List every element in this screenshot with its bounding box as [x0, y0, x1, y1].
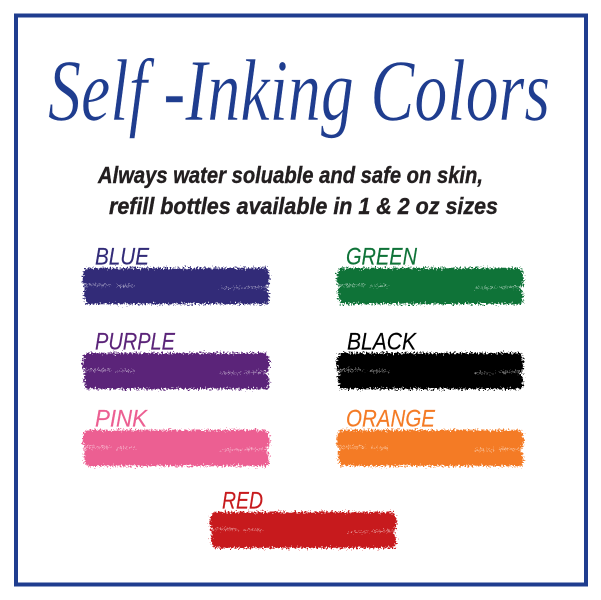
- swatch: red: [210, 488, 398, 548]
- swatch: black: [336, 328, 525, 389]
- swatch: purple: [82, 328, 271, 389]
- swatch: pink: PINK: [95, 406, 148, 432]
- subtitle: Always water soluable and safe on skin,: [97, 162, 483, 188]
- swatch: red: RED: [222, 488, 263, 514]
- swatch: purple: PURPLE: [95, 328, 176, 356]
- subtitle: refill bottles available in 1 & 2 oz sizes: [109, 193, 498, 219]
- swatch: blue: BLUE: [95, 244, 150, 270]
- swatch: green: [336, 244, 525, 304]
- swatch: black: BLACK: [347, 328, 417, 356]
- swatch: green: GREEN: [346, 244, 418, 270]
- swatch: orange: ORANGE: [346, 406, 436, 432]
- swatch: pink: [82, 406, 271, 466]
- swatch: blue: [82, 244, 271, 304]
- subtitle: [97, 162, 498, 219]
- swatch: orange: [336, 406, 525, 466]
